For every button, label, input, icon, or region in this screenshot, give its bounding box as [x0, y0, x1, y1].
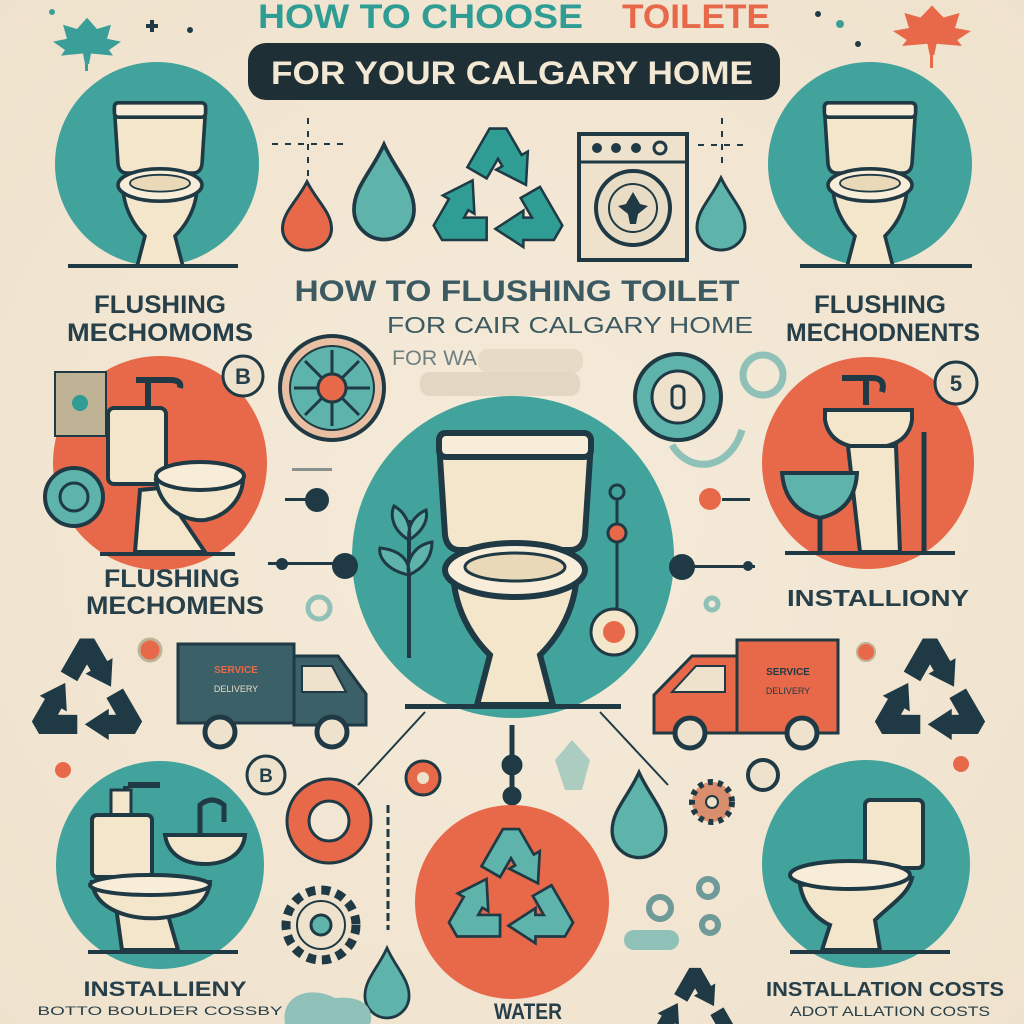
icon: recycle symbol	[423, 129, 573, 259]
title banner: FOR YOUR CALGARY HOME	[271, 55, 753, 91]
label: flushing mechanisms top left: MECHOMOMS	[67, 319, 253, 347]
icon: truck right: DELIVERY	[766, 686, 810, 696]
icon: life ring	[287, 779, 371, 863]
icon: teal water drop	[354, 144, 414, 240]
panel: water recycling circle	[415, 805, 609, 999]
decorative sparks left	[49, 9, 193, 33]
label: flushing mechomens	[86, 565, 264, 620]
icon: small red dot right	[857, 643, 875, 661]
subtitle text block: FOR CAIR CALGARY HOME	[387, 312, 753, 338]
label: flushing mechanisms top left: FLUSHING	[94, 291, 226, 319]
label: flushing mechanisms top right: FLUSHING	[814, 291, 946, 319]
icon: truck left: DELIVERY	[214, 684, 258, 694]
icon: truck right: SERVICE	[766, 667, 810, 678]
icon: badge B left	[223, 356, 263, 396]
title line	[258, 0, 770, 36]
label: water: WATER	[494, 999, 562, 1024]
icon: fan gauge	[280, 336, 384, 440]
label: flushing mechanisms top right: MECHODNENTS	[786, 319, 980, 347]
icon: target	[406, 761, 440, 795]
icon: plant	[380, 506, 432, 658]
icon: truck left: SERVICE	[214, 665, 258, 676]
icon: small red dot left	[139, 639, 161, 661]
decorative sparks right	[815, 11, 861, 47]
icon: recycle left	[23, 638, 152, 751]
title banner	[248, 43, 780, 100]
icon: drop lower right	[612, 772, 666, 858]
label: installieny and small text: INSTALLIENY	[84, 978, 246, 1001]
label: installation costs	[766, 979, 1004, 1019]
icon: small red dot lower right	[953, 756, 969, 772]
panel: row two right sink	[762, 357, 974, 569]
icon: teal water drop right	[697, 178, 745, 250]
icon: faded pipes	[624, 879, 718, 950]
label: installiony right: INSTALLIONY	[787, 585, 969, 611]
panel: row two left toilet	[45, 356, 267, 570]
icon: badge B left: B	[235, 364, 251, 389]
icon: gear	[286, 890, 356, 960]
icon: drop lower left	[365, 948, 409, 1018]
icon: badge small	[748, 760, 778, 790]
subtitle text block: HOW TO FLUSHING TOILET	[294, 275, 740, 308]
icon row: water saving symbols	[272, 118, 750, 260]
faded small icons	[308, 597, 718, 619]
label: installation costs: INSTALLATION COSTS	[766, 979, 1004, 1001]
icon: maple leaf teal	[53, 18, 121, 71]
icon: red water drop	[283, 182, 331, 250]
icon: dial right	[635, 354, 721, 440]
icon: badge B lower	[247, 756, 285, 794]
label: installation costs: ADOT ALLATION COSTS	[790, 1003, 990, 1019]
panel: bottom left toilet and sink	[56, 761, 264, 969]
center panel: main toilet	[352, 396, 674, 718]
connectors left	[268, 468, 358, 579]
panel: top left toilet	[55, 62, 259, 268]
label: installieny and small text	[38, 978, 282, 1018]
icon: small gear	[692, 782, 732, 822]
icon: washing machine	[579, 134, 687, 260]
icon: truck right	[654, 640, 838, 748]
icon: dashed marker right	[698, 118, 750, 166]
icon: truck left	[178, 644, 366, 747]
label: flushing mechomens: FLUSHING	[104, 565, 240, 593]
icon: recycle right	[866, 638, 995, 751]
panel: top right toilet	[768, 62, 972, 268]
connector lines from center	[358, 712, 668, 930]
subtitle text block: FOR WA	[392, 347, 477, 370]
subtitle text block	[294, 275, 753, 396]
icon: valve badge	[591, 485, 637, 655]
label: flushing mechomens: MECHOMENS	[86, 592, 264, 620]
icon: small red dot	[55, 762, 71, 778]
icon: small recycle bottom	[657, 968, 733, 1024]
icon: badge B lower: B	[259, 766, 273, 787]
icon: badge 5 right	[935, 362, 977, 404]
label: flushing mechanisms top right	[786, 291, 980, 347]
panel: bottom right toilet	[762, 760, 970, 968]
label: installieny and small text: BOTTO BOULDER COSSBY	[38, 1004, 282, 1018]
connectors right	[669, 488, 755, 580]
icon: maple leaf red	[893, 6, 971, 68]
label: flushing mechanisms top left	[67, 291, 253, 347]
icon: faded blob	[555, 740, 590, 790]
icon: dashed marker left	[272, 118, 345, 192]
icon: faded ring	[672, 355, 783, 464]
icon: faded cloud	[284, 992, 371, 1024]
icon: badge 5 right: 5	[950, 371, 962, 396]
